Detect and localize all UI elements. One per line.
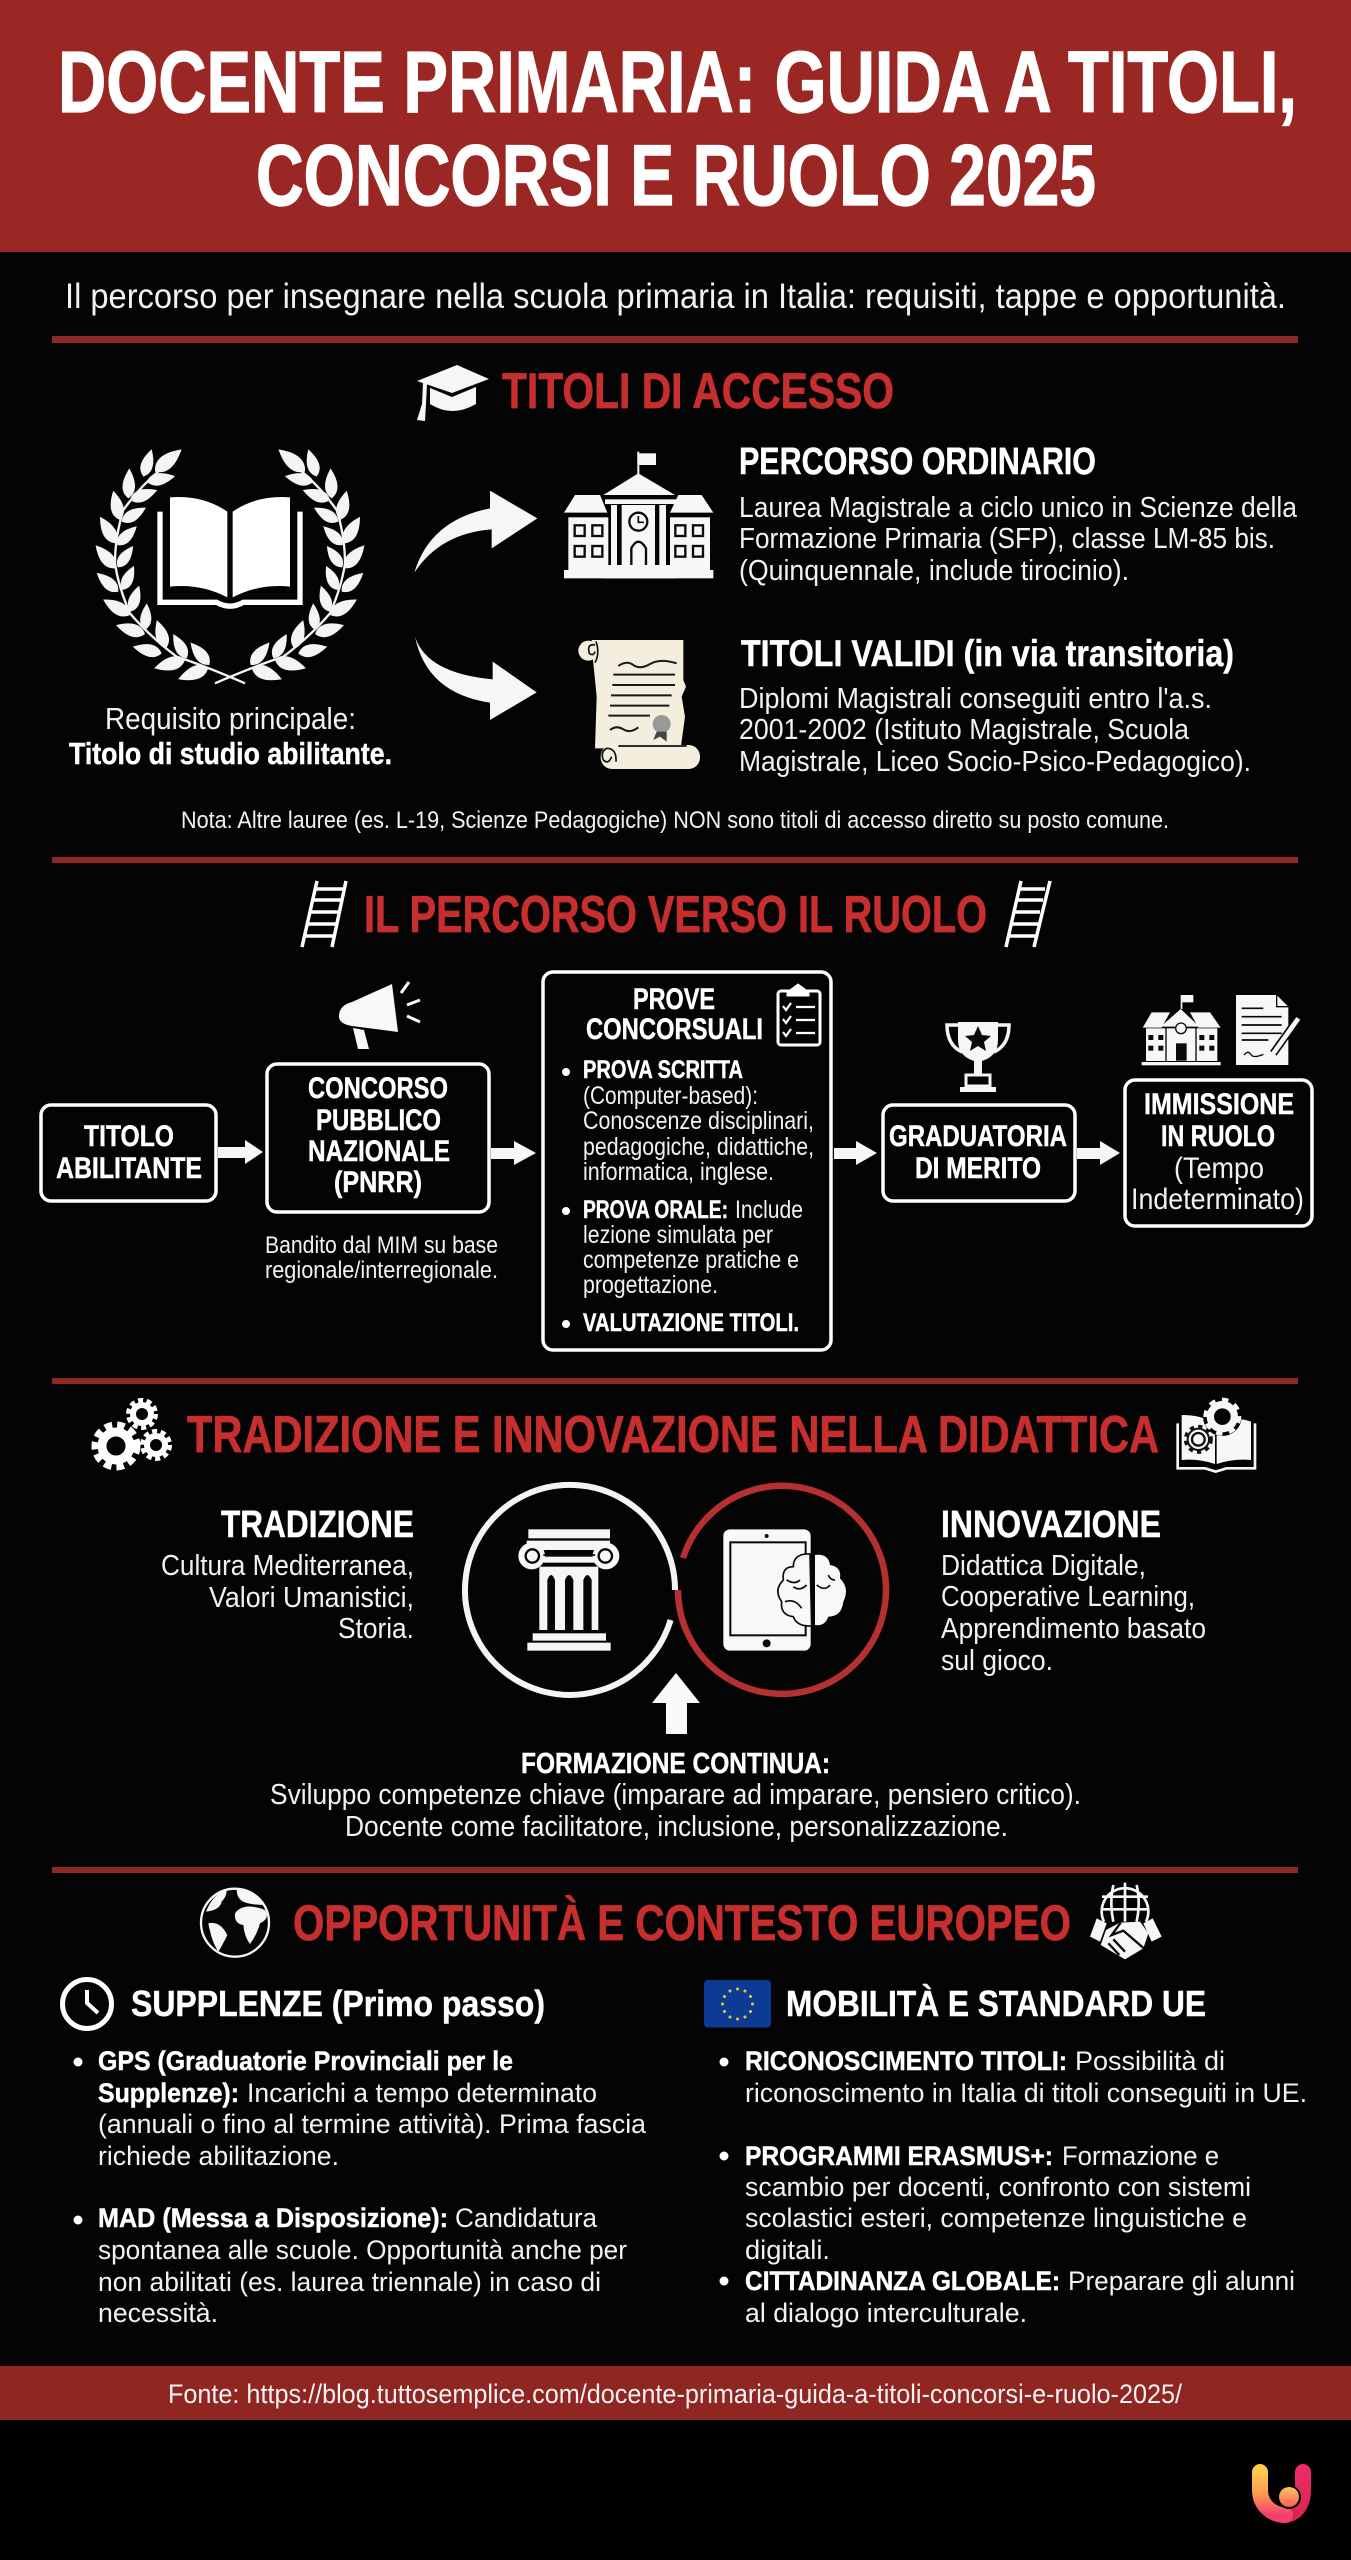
flow step: graduatoria di merito: GRADUATORIA bbox=[889, 1120, 1067, 1153]
list: mobilita: CITTADINANZA GLOBALE: bbox=[745, 2266, 1060, 2296]
icon: clipboard bbox=[778, 984, 820, 1045]
list: supplenze: necessità. bbox=[98, 2298, 218, 2328]
heading: titoli di accesso: TITOLI DI ACCESSO bbox=[502, 363, 894, 419]
icon: graduation cap bbox=[417, 365, 489, 421]
flow step: concorso pubblico nazionale bbox=[267, 1064, 489, 1212]
text: tradizione: Valori Umanistici, bbox=[209, 1582, 414, 1614]
icon: diploma scroll bbox=[578, 640, 700, 769]
list: mobilita: Preparare gli alunni bbox=[1068, 2266, 1295, 2296]
flow step: concorso pubblico nazionale: PUBBLICO bbox=[316, 1104, 441, 1137]
icon: university building bbox=[564, 452, 713, 578]
text: percorso ordinario: (Quinquennale, include tirocinio). bbox=[739, 555, 1129, 587]
list: supplenze: Incarichi a tempo determinato bbox=[247, 2078, 597, 2108]
flow step: immissione in ruolo: IMMISSIONE bbox=[1144, 1088, 1294, 1121]
text: formazione continua bbox=[270, 1748, 1081, 1843]
list: prove bbox=[562, 1056, 814, 1337]
icon: ladder left bbox=[302, 881, 346, 947]
text: tradizione: Cultura Mediterranea, bbox=[161, 1550, 414, 1582]
icon: trophy bbox=[947, 1022, 1009, 1092]
list: prove: (Computer-based): bbox=[583, 1082, 758, 1110]
circle: innovazione (red) bbox=[678, 1486, 886, 1694]
text: percorso ordinario bbox=[739, 441, 1298, 587]
list: prove: competenze pratiche e bbox=[583, 1246, 799, 1274]
list: mobilita: Formazione e bbox=[1062, 2141, 1219, 2171]
list: supplenze: MAD (Messa a Disposizione): bbox=[98, 2203, 448, 2233]
title bbox=[58, 34, 1297, 224]
list: prove: Conoscenze disciplinari, bbox=[583, 1107, 814, 1135]
section: tradizione e innovazione bbox=[95, 1400, 1255, 1843]
icon: laurel wreath with book bbox=[91, 444, 369, 686]
note: Nota: Altre lauree (es. L-19, Scienze Pedagogiche) NON sono titoli di accesso diretto su posto comune. bbox=[181, 807, 1169, 834]
text: titoli validi: Diplomi Magistrali conseguiti entro l'a.s. bbox=[739, 683, 1212, 715]
icon: ladder right bbox=[1006, 881, 1050, 947]
text: titoli validi bbox=[739, 633, 1251, 778]
text: innovazione: Didattica Digitale, bbox=[941, 1550, 1146, 1582]
arrow: step 4 to 5 bbox=[1077, 1141, 1120, 1165]
header banner bbox=[0, 0, 1351, 252]
subtitle: Il percorso per insegnare nella scuola primaria in Italia: requisiti, tappe e opportunità. bbox=[65, 277, 1286, 316]
list: mobilita: riconoscimento in Italia di titoli conseguiti in UE. bbox=[745, 2078, 1307, 2108]
icon: clock bbox=[62, 1980, 112, 2028]
text: percorso ordinario: Formazione Primaria (SFP), classe LM-85 bis. bbox=[739, 523, 1275, 555]
text: formazione continua: Sviluppo competenze chiave (imparare ad imparare, pensiero critico). bbox=[270, 1779, 1081, 1811]
text: innovazione bbox=[941, 1504, 1206, 1677]
list: prove: pedagogiche, didattiche, bbox=[583, 1133, 814, 1161]
flow step: prove concorsuali bbox=[543, 972, 831, 1350]
caption: bandito dal MIM bbox=[265, 1232, 498, 1284]
logo bbox=[1260, 2472, 1303, 2515]
list: mobilita: scambio per docenti, confronto con sistemi bbox=[745, 2172, 1251, 2202]
icon: EU flag bbox=[704, 1980, 771, 2028]
icon: globe bbox=[201, 1889, 269, 1957]
flow step: concorso pubblico nazionale: CONCORSO bbox=[308, 1072, 448, 1105]
flow step: titolo abilitante bbox=[41, 1105, 216, 1201]
list: prove: PROVA SCRITTA bbox=[583, 1056, 743, 1084]
title: CONCORSI E RUOLO 2025 bbox=[256, 128, 1096, 224]
arrow: curved down to titoli validi bbox=[415, 637, 537, 720]
text: requisito principale: Requisito principale: bbox=[105, 701, 356, 736]
section: il percorso verso il ruolo bbox=[41, 881, 1312, 1350]
text: percorso ordinario: PERCORSO ORDINARIO bbox=[739, 441, 1096, 483]
list: mobilita: al dialogo interculturale. bbox=[745, 2298, 1027, 2328]
flow step: concorso pubblico nazionale: (PNRR) bbox=[334, 1166, 422, 1199]
heading: il percorso verso il ruolo: IL PERCORSO VERSO IL RUOLO bbox=[364, 886, 987, 944]
list: supplenze: (annuali o fino al termine attività). Prima fascia bbox=[98, 2109, 647, 2139]
icon: book with gears bbox=[1178, 1400, 1255, 1472]
list: mobilita: scolastici esteri, competenze linguistiche e bbox=[745, 2203, 1247, 2233]
text: innovazione: Cooperative Learning, bbox=[941, 1581, 1195, 1613]
list: prove: Include bbox=[735, 1196, 803, 1224]
list: prove: informatica, inglese. bbox=[583, 1158, 774, 1186]
flow step: prove concorsuali: PROVE bbox=[633, 983, 715, 1016]
list: supplenze: Candidatura bbox=[455, 2203, 598, 2233]
arrow: curved up to percorso ordinario bbox=[414, 491, 537, 573]
text: percorso ordinario: Laurea Magistrale a ciclo unico in Scienze della bbox=[739, 492, 1298, 524]
flow step: graduatoria di merito: DI MERITO bbox=[915, 1152, 1041, 1185]
text: titoli validi: Magistrale, Liceo Socio-Psico-Pedagogico). bbox=[739, 746, 1251, 778]
caption: bandito dal MIM: Bandito dal MIM su base bbox=[265, 1232, 498, 1259]
icon: megaphone bbox=[339, 982, 420, 1049]
section: opportunita e contesto europeo bbox=[62, 1883, 1307, 2328]
flow step: immissione in ruolo: (Tempo bbox=[1174, 1152, 1264, 1185]
list: mobilita: Possibilità di bbox=[1075, 2046, 1225, 2076]
icon: gears bbox=[95, 1400, 170, 1467]
heading: opportunita e contesto europeo: OPPORTUNITÀ E CONTESTO EUROPEO bbox=[293, 1895, 1071, 1951]
subsection: supplenze bbox=[62, 1980, 647, 2328]
text: innovazione: sul gioco. bbox=[941, 1645, 1053, 1677]
circle: tradizione (white) bbox=[465, 1485, 675, 1695]
text: requisito principale: Titolo di studio abilitante. bbox=[69, 736, 392, 771]
text: tradizione: Storia. bbox=[338, 1613, 414, 1645]
list: supplenze: richiede abilitazione. bbox=[98, 2141, 339, 2171]
list: mobilita: RICONOSCIMENTO TITOLI: bbox=[745, 2046, 1067, 2076]
flow step: immissione in ruolo: IN RUOLO bbox=[1161, 1120, 1275, 1153]
text: formazione continua: FORMAZIONE CONTINUA: bbox=[521, 1748, 830, 1780]
text: titoli validi: TITOLI VALIDI (in via transitoria) bbox=[741, 633, 1234, 674]
arrow: step 3 to 4 bbox=[834, 1141, 877, 1165]
section: titoli di accesso bbox=[69, 363, 1298, 834]
list: supplenze: non abilitati (es. laurea triennale) in caso di bbox=[98, 2267, 601, 2297]
text: innovazione: Apprendimento basato bbox=[941, 1613, 1206, 1645]
list: supplenze: GPS (Graduatorie Provinciali per le bbox=[98, 2046, 513, 2076]
list: prove: PROVA ORALE: bbox=[583, 1196, 728, 1224]
list: prove: progettazione. bbox=[583, 1271, 718, 1299]
arrow: step 2 to 3 bbox=[491, 1141, 536, 1165]
arrow: formazione continua up bbox=[652, 1673, 700, 1734]
text: innovazione: INNOVAZIONE bbox=[941, 1504, 1161, 1546]
text: titoli validi: 2001-2002 (Istituto Magistrale, Scuola bbox=[739, 714, 1190, 746]
arrow: step 1 to 2 bbox=[218, 1140, 263, 1164]
list: prove: lezione simulata per bbox=[583, 1221, 773, 1249]
flow step: immissione in ruolo bbox=[1125, 1080, 1312, 1226]
heading: supplenze: SUPPLENZE (Primo passo) bbox=[131, 1983, 545, 2024]
list: mobilita: PROGRAMMI ERASMUS+: bbox=[745, 2141, 1053, 2171]
subsection: mobilita e standard UE bbox=[704, 1980, 1307, 2328]
caption: bandito dal MIM: regionale/interregionale. bbox=[265, 1257, 498, 1284]
text: formazione continua: Docente come facilitatore, inclusione, personalizzazione. bbox=[345, 1811, 1008, 1843]
footer band bbox=[0, 2366, 1351, 2420]
icon: school building small bbox=[1142, 995, 1221, 1065]
flow step: titolo abilitante: ABILITANTE bbox=[56, 1152, 202, 1185]
list: supplenze bbox=[74, 2046, 647, 2328]
flow step: graduatoria di merito bbox=[883, 1105, 1075, 1201]
list: mobilita bbox=[720, 2046, 1307, 2328]
flow step: immissione in ruolo: Indeterminato) bbox=[1131, 1183, 1304, 1216]
text: tradizione: TRADIZIONE bbox=[221, 1504, 414, 1546]
list: mobilita: digitali. bbox=[745, 2235, 830, 2265]
list: supplenze: Supplenze): bbox=[98, 2078, 239, 2108]
list: prove: VALUTAZIONE TITOLI. bbox=[583, 1309, 799, 1337]
source text: Fonte: https://blog.tuttosemplice.com/docente-primaria-guida-a-titoli-concorsi-e-ruolo-2025/ bbox=[168, 2379, 1182, 2409]
icon: signed document bbox=[1236, 995, 1298, 1065]
list: supplenze: spontanea alle scuole. Opportunità anche per bbox=[98, 2235, 627, 2265]
icon: ionic column bbox=[518, 1529, 619, 1651]
text: tradizione bbox=[161, 1504, 414, 1645]
flow step: prove concorsuali: CONCORSUALI bbox=[586, 1013, 763, 1046]
text: requisito principale bbox=[69, 701, 392, 771]
flow step: concorso pubblico nazionale: NAZIONALE bbox=[308, 1135, 450, 1168]
flow step: titolo abilitante: TITOLO bbox=[84, 1120, 174, 1153]
icon: globe and handshake bbox=[1090, 1883, 1162, 1959]
heading: mobilita e standard UE: MOBILITÀ E STANDARD UE bbox=[786, 1983, 1206, 2024]
icon: tablet and brain bbox=[723, 1529, 846, 1651]
